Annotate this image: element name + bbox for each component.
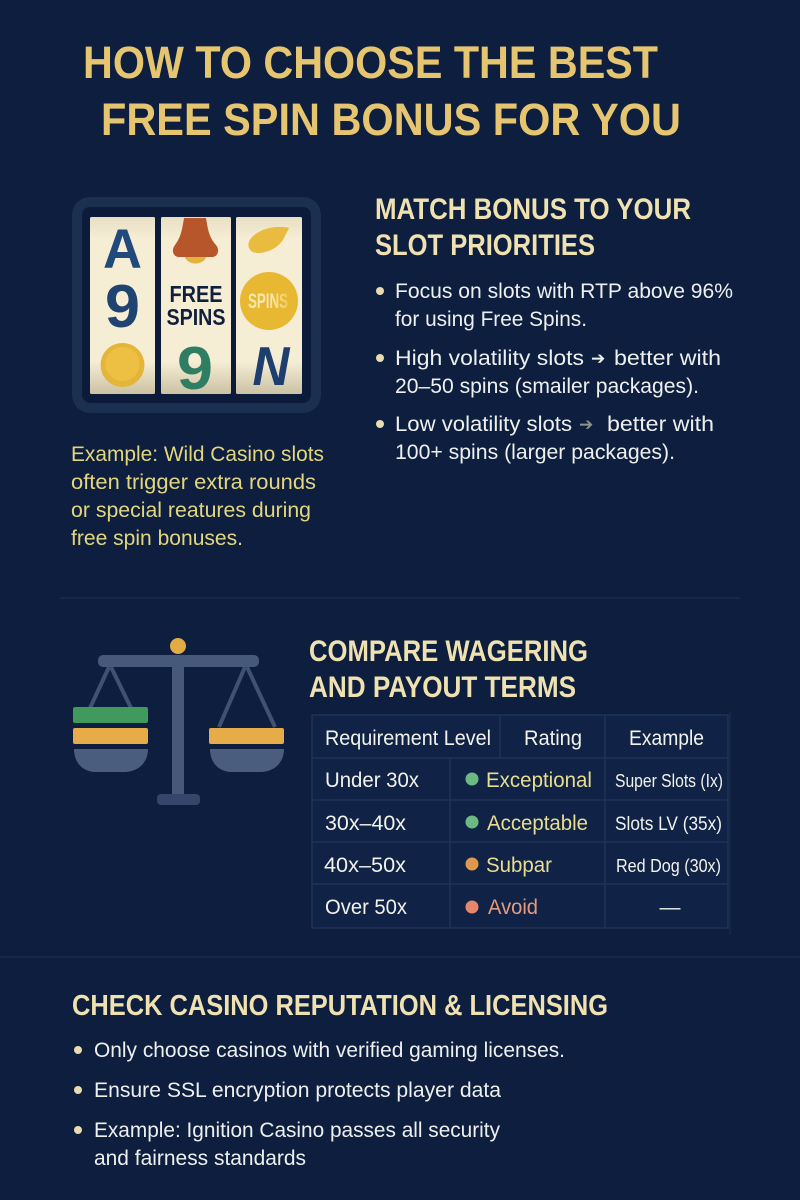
heading: compare wagering: COMPARE WAGERING	[309, 635, 588, 668]
bullet list: slot priorities	[376, 280, 733, 464]
reel 2	[161, 217, 231, 402]
row: 30x-40x: Slots LV (35x)	[615, 814, 722, 835]
bullet list: slot priorities: for using Free Spins.	[395, 308, 587, 331]
wagering table	[312, 712, 730, 934]
bullet list: slot priorities: High volatility slots	[395, 347, 584, 370]
title	[83, 37, 681, 145]
heading: compare wagering: AND PAYOUT TERMS	[309, 671, 576, 704]
row: 40x-50x	[324, 854, 721, 877]
title: HOW TO CHOOSE THE BEST	[83, 37, 658, 88]
reel 1	[90, 217, 155, 394]
reel 2: SPINS	[166, 304, 226, 330]
heading: casino reputation: CHECK CASINO REPUTATION & LICENSING	[72, 990, 608, 1022]
bullet list: slot priorities: ➔	[591, 349, 605, 368]
row: under 30x: Exceptional	[486, 769, 592, 792]
bullet list: slot priorities: 20–50 spins (smailer packages).	[395, 375, 699, 398]
row: over 50x: —	[660, 896, 680, 919]
row: over 50x: Avoid	[488, 896, 538, 919]
row: over 50x: Over 50x	[325, 896, 407, 919]
bullet list: licensing: Ensure SSL encryption protects player data	[94, 1079, 501, 1102]
reel 3: N	[252, 335, 291, 397]
reel 2: FREE	[170, 281, 222, 307]
bullet list: slot priorities: ➔	[579, 415, 593, 434]
example text: or special reatures during	[71, 499, 311, 522]
reel 3	[236, 217, 302, 397]
table header: Rating	[524, 727, 582, 750]
bullet list: slot priorities: Focus on slots with RTP above 96%	[395, 280, 733, 303]
row: under 30x: Under 30x	[325, 769, 419, 792]
reel 1: 9	[105, 273, 140, 340]
bullet list: slot priorities: better with	[614, 347, 721, 370]
icon: slot machine	[72, 197, 321, 413]
bullet list: licensing: Example: Ignition Casino passes all security	[94, 1119, 500, 1142]
reel 2: 9	[177, 335, 213, 402]
heading: compare wagering	[309, 635, 588, 704]
table header: Example	[629, 727, 704, 750]
table header: Requirement Level	[325, 727, 491, 750]
bullet list: slot priorities: 100+ spins (larger packages).	[395, 441, 675, 464]
example text: free spin bonuses.	[71, 527, 243, 550]
heading: match bonus	[375, 193, 691, 262]
row: 30x-40x	[325, 812, 722, 835]
example text: often trigger extra rounds	[71, 471, 316, 494]
example text: Example: Wild Casino slots	[71, 443, 324, 466]
table header	[325, 727, 704, 750]
example text	[71, 443, 324, 550]
bullet list: licensing: and fairness standards	[94, 1147, 306, 1170]
title: FREE SPIN BONUS FOR YOU	[101, 94, 681, 145]
heading: match bonus: MATCH BONUS TO YOUR	[375, 193, 691, 226]
row: over 50x	[325, 896, 680, 919]
row: under 30x: Super Slots (Ix)	[615, 771, 723, 791]
bullet list: licensing: Only choose casinos with verified gaming licenses.	[94, 1039, 565, 1062]
reel 1: A	[103, 217, 142, 280]
reel 3: SPINS	[248, 290, 288, 313]
row: 30x-40x: Acceptable	[487, 812, 588, 835]
heading: match bonus: SLOT PRIORITIES	[375, 229, 595, 262]
icon: balance scale	[73, 638, 284, 805]
bullet list: licensing	[74, 1039, 565, 1170]
row: 30x-40x: 30x–40x	[325, 812, 406, 835]
row: 40x-50x: 40x–50x	[324, 854, 407, 877]
bullet list: slot priorities: better with	[607, 413, 714, 436]
row: under 30x	[325, 769, 723, 792]
row: 40x-50x: Subpar	[486, 854, 552, 877]
bullet list: slot priorities: Low volatility slots	[395, 413, 572, 436]
row: 40x-50x: Red Dog (30x)	[616, 856, 721, 876]
